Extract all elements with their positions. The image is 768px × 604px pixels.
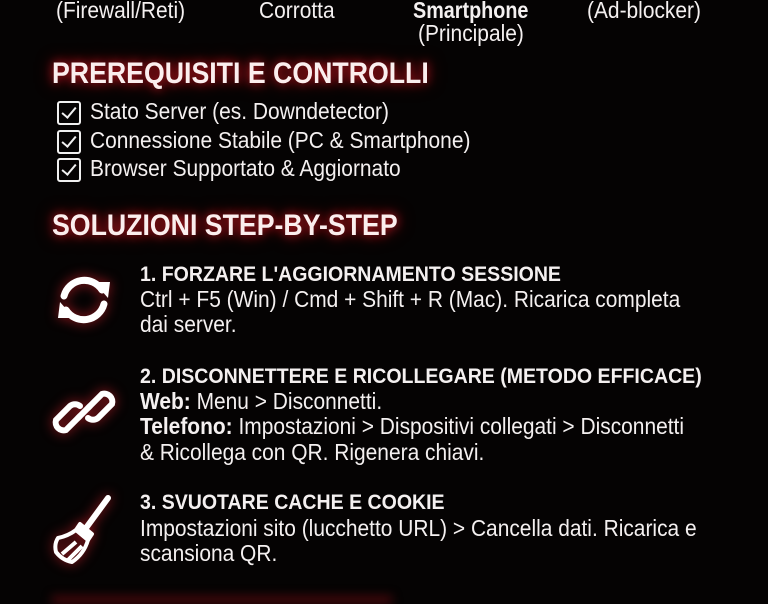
icon: broom [46, 490, 117, 571]
checklist: Connessione Stabile (PC & Smartphone) [90, 127, 470, 153]
step 3: 3. SVUOTARE CACHE E COOKIE [140, 491, 445, 514]
top row labels: (Principale) [418, 20, 524, 46]
step 3: Impostazioni sito (lucchetto URL) > Cancella dati. Ricarica e [140, 515, 697, 541]
top row labels [56, 0, 701, 46]
heading: soluzioni: SOLUZIONI STEP-BY-STEP [52, 209, 398, 242]
icon: link [45, 383, 123, 441]
step 2 [140, 365, 702, 465]
checklist: Browser Supportato & Aggiornato [90, 155, 401, 181]
step 1: Ctrl + F5 (Win) / Cmd + Shift + R (Mac). Ricarica completa [140, 286, 680, 312]
checklist: Stato Server (es. Downdetector) [90, 98, 389, 124]
cropped next heading glow [52, 596, 392, 604]
step 2: Web: Menu > Disconnetti. [140, 388, 382, 414]
step 1 [140, 263, 680, 337]
step 1: dai server. [140, 311, 237, 337]
step 3 [140, 491, 697, 566]
step 1: 1. FORZARE L'AGGIORNAMENTO SESSIONE [140, 263, 561, 286]
icon: refresh [50, 268, 118, 332]
step 2: Telefono: Impostazioni > Dispositivi collegati > Disconnetti [140, 413, 684, 439]
step 2: & Ricollega con QR. Rigenera chiavi. [140, 439, 484, 465]
step 2: 2. DISCONNETTERE E RICOLLEGARE (METODO EFFICACE) [140, 365, 702, 388]
heading: prerequisiti: PREREQUISITI E CONTROLLI [52, 57, 429, 90]
checklist [57, 98, 470, 182]
step 3: scansiona QR. [140, 540, 277, 566]
